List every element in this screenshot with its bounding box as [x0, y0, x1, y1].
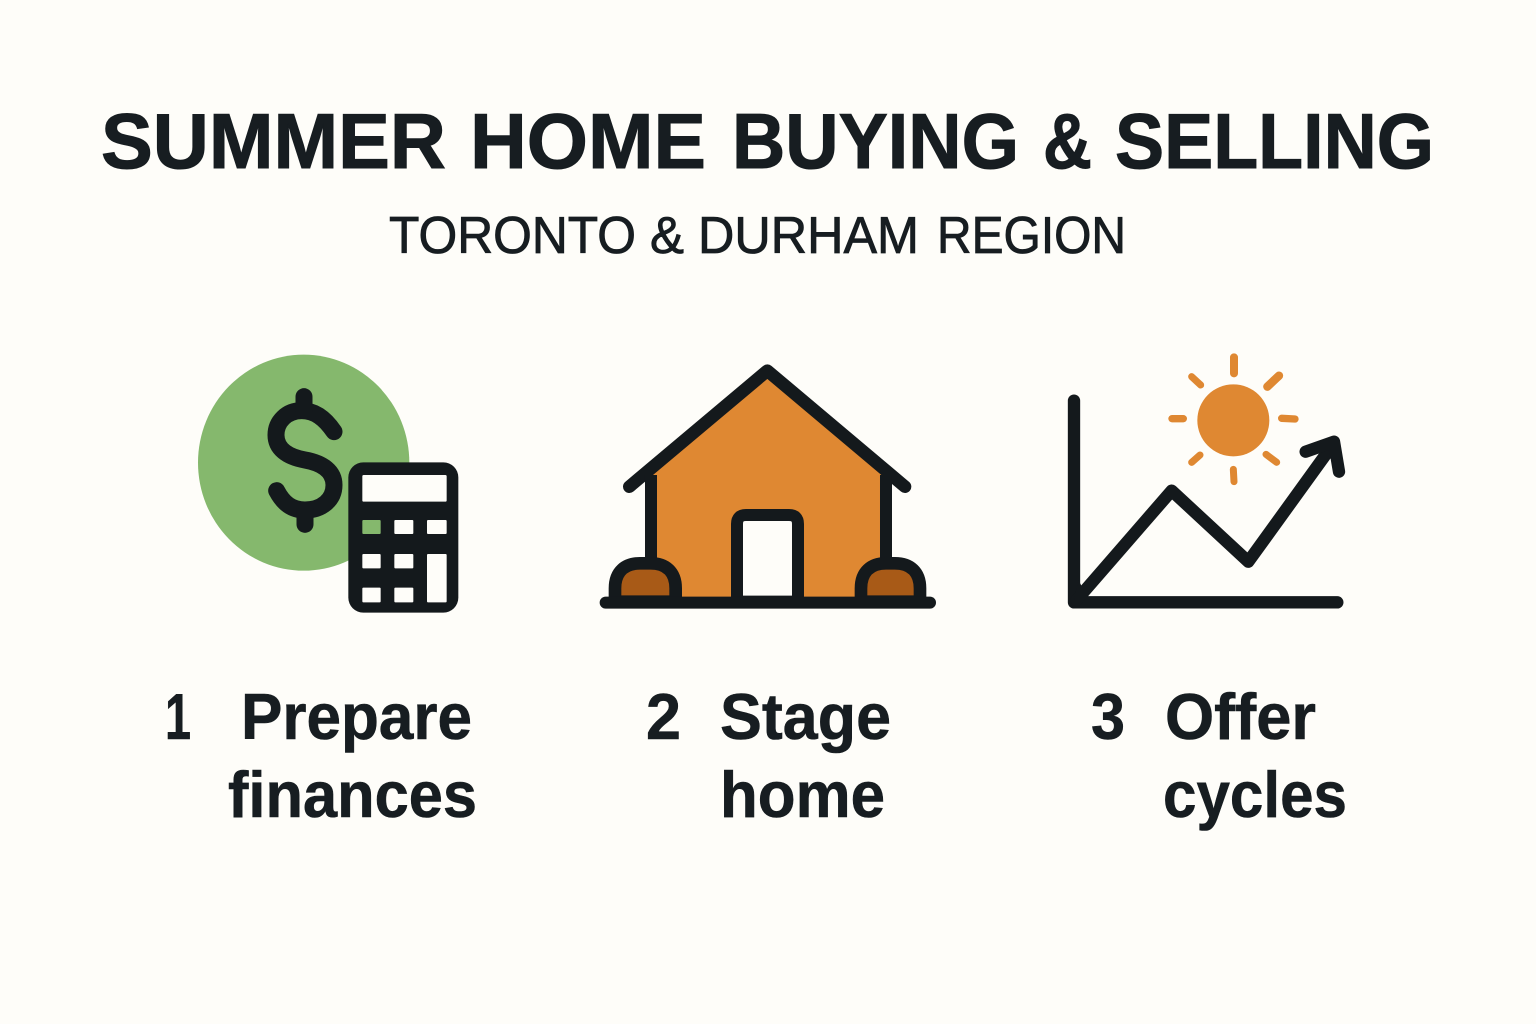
title: HOME — [470, 97, 706, 185]
step 2 label: Stage — [720, 680, 891, 753]
subtitle: & — [650, 207, 684, 265]
step 1 label: finances — [228, 758, 477, 831]
subtitle: TORONTO — [389, 207, 636, 265]
step 3 label: Offer — [1165, 680, 1316, 753]
step 1 label: 1 — [165, 680, 191, 753]
title: & — [1043, 97, 1092, 185]
title: BUYING — [732, 97, 1019, 185]
step 1 label — [165, 680, 477, 831]
step 3 label: 3 — [1091, 680, 1125, 753]
title — [101, 97, 1434, 185]
icon: chart with sun — [1073, 357, 1339, 603]
step 3 label: cycles — [1163, 758, 1347, 831]
icon: house — [606, 371, 930, 603]
subtitle: REGION — [937, 207, 1126, 265]
title: SELLING — [1115, 97, 1434, 185]
icon: dollar and calculator — [198, 355, 458, 613]
subtitle: DURHAM — [698, 207, 919, 265]
title: SUMMER — [101, 97, 446, 185]
step 2 label: home — [720, 758, 885, 831]
step 3 label — [1091, 680, 1347, 831]
step 2 label: 2 — [646, 680, 681, 753]
subtitle — [389, 207, 1126, 265]
step 1 label: Prepare — [241, 680, 472, 753]
step 2 label — [646, 680, 891, 831]
